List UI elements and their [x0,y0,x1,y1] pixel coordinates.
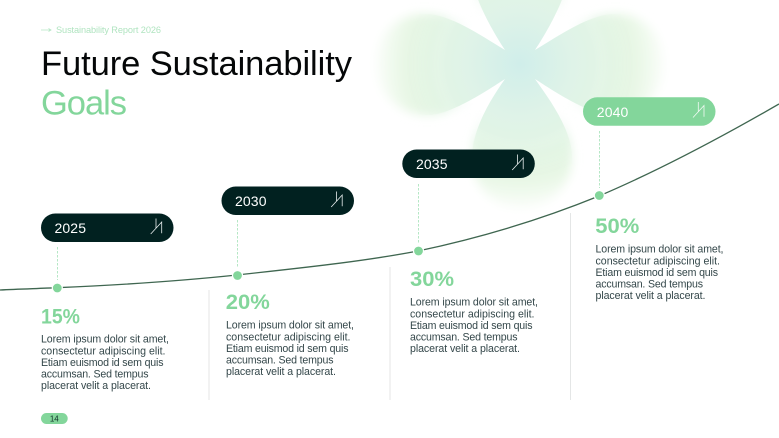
milestone text: 20%: 20% [226,291,270,314]
pill: 2030 [222,186,354,215]
milestone text: 15%: Lorem ipsum dolor sit amet, [41,334,169,346]
milestone text: 50%: placerat velit a placerat. [596,290,706,302]
milestone text: 50%: Etiam euismod id sem quis [596,267,718,279]
header: eyebrow: Sustainability Report 2026 [56,25,161,35]
pill: 2035 [402,150,535,178]
milestone text: 50%: accumsan. Sed tempus [596,278,703,290]
milestone text: 15%: Etiam euismod id sem quis [41,357,164,369]
title: Goals [41,84,127,122]
decorative flower [376,0,664,208]
pill: 2025: 2025 [54,220,86,236]
milestone text: 30%: Lorem ipsum dolor sit amet, [410,296,538,308]
milestone text: 30%: placerat velit a placerat. [410,343,520,355]
milestone text: 15%: consectetur adipiscing elit. [41,346,166,358]
vertical dividers [209,213,570,400]
milestone text: 20%: Etiam euismod id sem quis [226,343,348,355]
milestone text: 15%: 15% [41,305,80,328]
growth curve [0,104,779,290]
pill: 2030: 2030 [235,193,267,209]
milestone text: 20% [226,291,354,378]
data point dots [52,190,604,293]
milestone text: 20%: placerat velit a placerat. [226,366,336,378]
milestone text: 30% [410,268,538,355]
milestone text: 30%: 30% [410,268,454,291]
pill: 2025 [41,214,174,242]
page number: 14 [50,414,59,424]
milestone text: 30%: Etiam euismod id sem quis [410,320,532,332]
title: Future Sustainability [41,45,353,83]
dashed connectors [58,131,600,280]
milestone text: 15% [41,305,169,392]
milestone text: 50%: 50% [595,215,640,238]
milestone text: 20%: consectetur adipiscing elit. [226,332,350,344]
milestone text: 15%: placerat velit a placerat. [41,380,151,392]
title [41,45,353,122]
milestone text: 30%: accumsan. Sed tempus [410,332,518,344]
milestone text: 50%: consectetur adipiscing elit. [596,256,720,268]
milestone text: 20%: Lorem ipsum dolor sit amet, [226,320,354,332]
milestone text: 15%: accumsan. Sed tempus [41,368,148,380]
pill: 2035: 2035 [416,156,448,172]
pill: 2040: 2040 [597,104,629,120]
milestone text: 20%: accumsan. Sed tempus [226,354,334,366]
page number [41,413,68,424]
milestone text: 50% [595,215,724,302]
pill: 2040 [583,97,716,126]
milestone text: 30%: consectetur adipiscing elit. [410,308,534,320]
milestone text: 50%: Lorem ipsum dolor sit amet, [596,244,724,256]
